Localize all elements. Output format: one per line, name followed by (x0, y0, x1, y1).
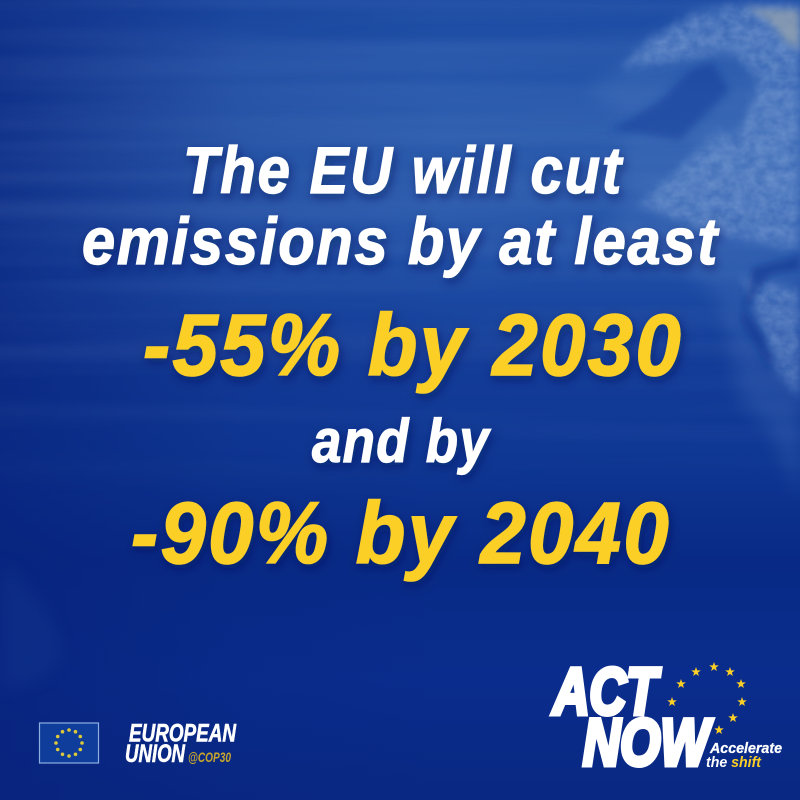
stat: -55% by 2030: -55% by 2030 (143, 297, 683, 394)
text: European Union: UNION (125, 740, 186, 768)
tagline (706, 741, 782, 771)
icon: star ring (667, 662, 747, 734)
stat: -90% by 2040: -90% by 2040 (131, 485, 671, 582)
logo: European Union (40, 720, 237, 768)
headline: emissions by at least (82, 204, 720, 278)
text: European Union: EUROPEAN (129, 720, 237, 748)
icon: EU flag (40, 723, 98, 763)
wordmark: ACT NOW (551, 654, 713, 779)
earth texture (560, 4, 800, 500)
text: European Union: @COP30 (188, 749, 231, 765)
headline (82, 133, 720, 278)
tagline: the shift (706, 755, 762, 771)
tagline: Accelerate (709, 741, 782, 757)
text: European Union (125, 720, 237, 768)
connector: and by: and by (312, 407, 491, 475)
headline: The EU will cut (183, 133, 624, 207)
wordmark: ACT NOW: NOW (583, 705, 713, 779)
logo: Act Now (551, 654, 782, 779)
wordmark: ACT NOW: ACT (551, 654, 661, 728)
